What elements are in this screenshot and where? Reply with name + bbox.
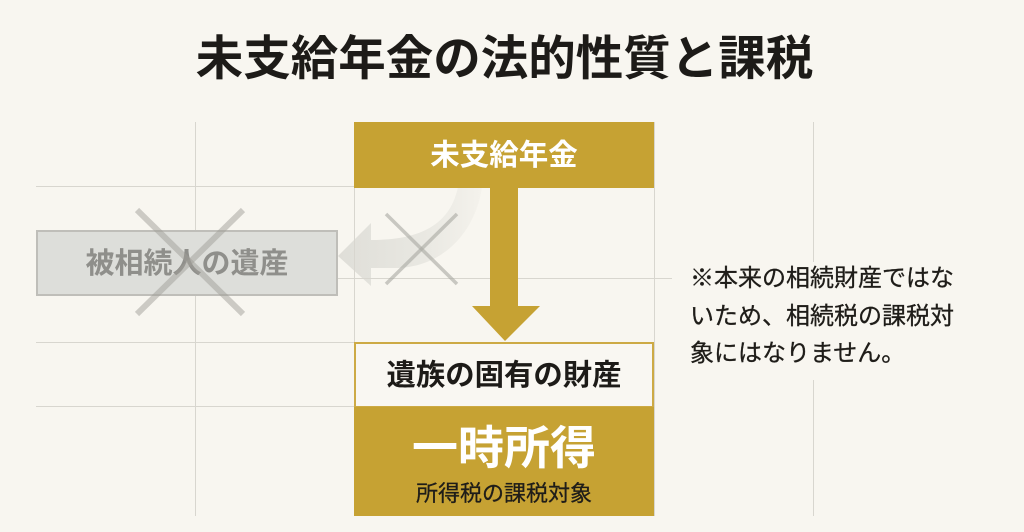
heading: temporary income: 一時所得 <box>412 422 596 474</box>
panel: unpaid pension header <box>354 122 654 188</box>
icon: cross over faded arrow <box>384 212 458 286</box>
panel: excluded estate box <box>36 230 338 296</box>
panel: inherent property of survivors: 遺族の固有の財産 <box>386 359 622 392</box>
panel: unpaid pension header: 未支給年金 <box>430 139 578 172</box>
arrow: faded curved arrow to estate <box>338 188 460 286</box>
panel: excluded estate box: 被相続人の遺産 <box>85 248 288 280</box>
text: subject to income tax: 所得税の課税対象 <box>416 481 592 506</box>
note text: 象にはなりません。 <box>690 340 905 367</box>
note text <box>690 265 954 367</box>
arrow: pension down to inherent property <box>472 188 540 341</box>
note text: いため、相続税の課税対 <box>690 302 954 330</box>
panel: inherent property of survivors <box>354 342 654 408</box>
note text: ※本来の相続財産ではな <box>690 265 954 292</box>
title: 未支給年金の法的性質と課税 <box>196 33 813 86</box>
panel: temporary income <box>354 407 654 516</box>
icon: cross over estate box <box>135 208 245 316</box>
